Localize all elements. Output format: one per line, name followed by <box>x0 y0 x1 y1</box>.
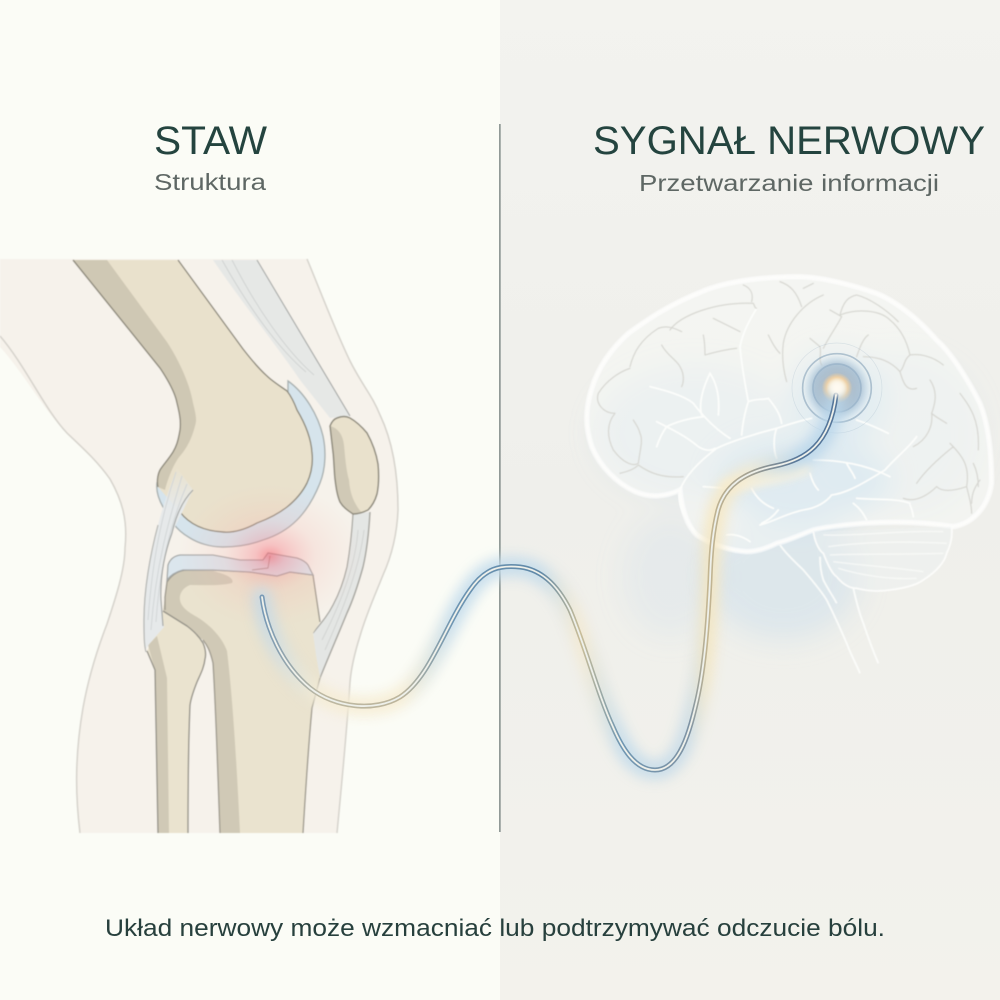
pain glow at the knee <box>178 484 362 628</box>
target rings <box>792 343 882 433</box>
panel: left background <box>0 0 500 1000</box>
patella <box>330 416 379 514</box>
white central sulci <box>650 308 917 542</box>
heading: STAW: STAW <box>154 119 267 163</box>
panel: right background <box>500 0 1000 1000</box>
grey gyri lines <box>598 282 980 513</box>
subheading: Przetwarzanie informacji: Przetwarzanie informacji <box>639 170 939 196</box>
brain outline glow <box>587 277 992 552</box>
heading: SYGNAŁ NERWOWY: SYGNAŁ NERWOWY <box>593 119 985 163</box>
nerve highlight <box>262 395 836 770</box>
femoral cartilage <box>157 381 325 547</box>
cerebellum <box>813 527 952 591</box>
blue glow behind brain <box>597 353 980 640</box>
panel: knee joint illustration <box>0 259 398 833</box>
leg silhouette <box>0 259 398 833</box>
femur shaded edge <box>73 260 196 490</box>
fibula <box>147 611 206 833</box>
leg outline <box>0 259 398 833</box>
cerebellum folds <box>823 531 947 579</box>
patellar tendon <box>313 512 370 678</box>
caption: Układ nerwowy może wzmacniać lub podtrzymywać odczucie bólu. <box>105 915 885 942</box>
tibia outline <box>165 570 320 833</box>
fibula outline <box>147 611 206 833</box>
tibia shaded edge <box>163 570 240 833</box>
fibula shaded edge <box>148 636 169 833</box>
nerve glow <box>262 395 836 770</box>
signal spark <box>829 380 845 396</box>
femur outline <box>73 260 312 532</box>
brainstem <box>780 545 878 673</box>
divider line <box>499 124 500 832</box>
femur <box>73 260 312 532</box>
warm highlight along nerve <box>727 468 803 487</box>
subheading: Struktura: Struktura <box>154 169 266 195</box>
nerve core <box>262 395 836 770</box>
tibial cartilage <box>167 553 313 580</box>
quadriceps tendon <box>213 260 350 418</box>
nerve signal path <box>262 395 836 770</box>
tibia <box>163 570 320 833</box>
panel: brain illustration <box>587 277 992 673</box>
brain outline <box>587 277 992 552</box>
signal focal point <box>804 355 870 421</box>
lateral ligament <box>143 468 193 650</box>
